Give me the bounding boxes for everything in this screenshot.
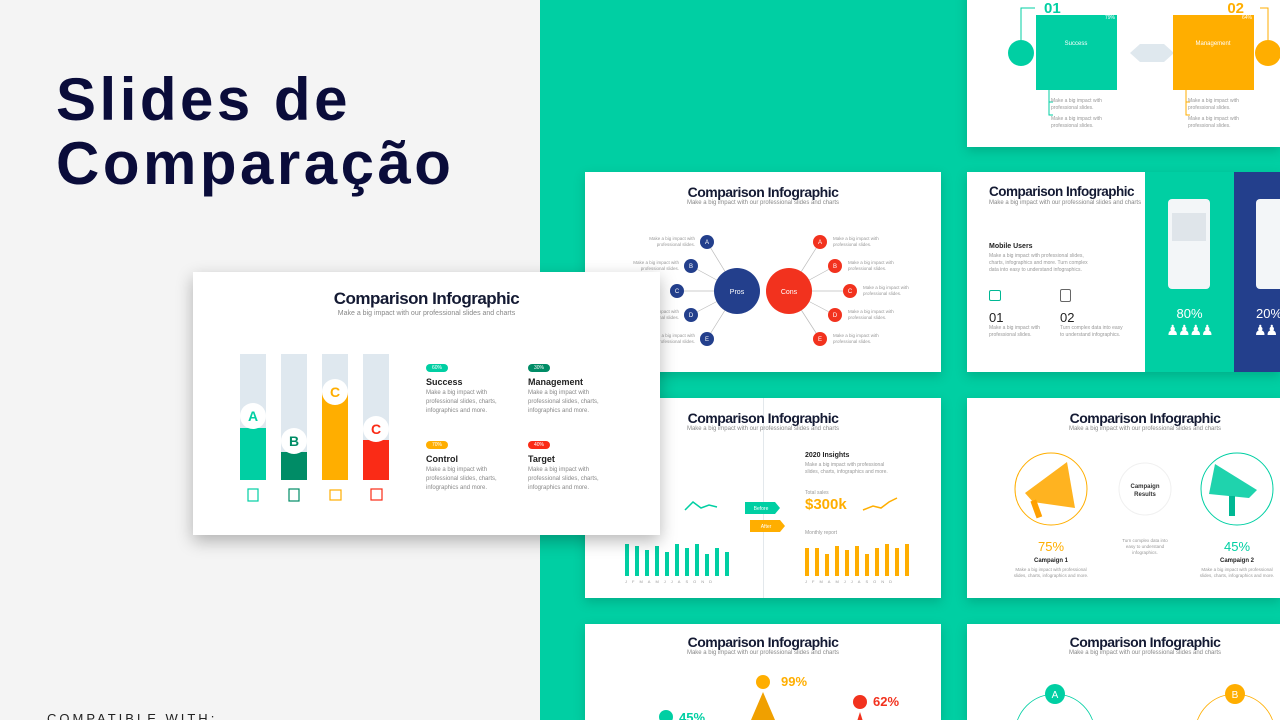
card: mobile users: 01 xyxy=(989,310,1003,325)
bar chart: A xyxy=(248,408,258,424)
card: pros and cons: A xyxy=(818,240,822,246)
card: top right process: Make a big impact with xyxy=(1051,116,1102,122)
card: before/after insights xyxy=(585,398,941,598)
card: mobile users: professional slides. xyxy=(989,332,1032,338)
card: before/after insights: Monthly report xyxy=(805,530,837,536)
card: campaign results xyxy=(967,398,1280,598)
card: before/after insights: Total sales xyxy=(805,490,829,496)
item: management: 30% xyxy=(534,365,544,371)
navy phone panel xyxy=(1234,172,1280,372)
card: top right process: professional slides. xyxy=(1051,105,1094,111)
card: pros and cons: C xyxy=(848,289,853,295)
card: campaign results: Make a big impact with professional xyxy=(1015,567,1087,572)
card: pros and cons: E xyxy=(818,337,822,343)
item: success: Make a big impact with xyxy=(426,390,487,396)
item: management: professional slides, charts, xyxy=(528,399,599,405)
card: pros and cons: Make a big impact with xyxy=(848,260,894,265)
after tag: After xyxy=(761,524,772,530)
card: A/B circles xyxy=(967,624,1280,720)
card: campaign results: infographics. xyxy=(1132,550,1158,555)
card: campaign results: Make a big impact with our professional slides and charts xyxy=(1069,426,1221,432)
bar chart: C xyxy=(330,384,340,400)
bar chart xyxy=(240,354,389,502)
card: pros and cons: professional slides. xyxy=(863,291,901,296)
item: target: infographics and more. xyxy=(528,485,589,491)
item: management: infographics and more. xyxy=(528,408,589,414)
item: control: infographics and more. xyxy=(426,485,487,491)
before tag: Before xyxy=(754,506,769,512)
item: control: Control xyxy=(426,454,458,464)
card: top right process: professional slides. xyxy=(1051,123,1094,129)
card: pyramid: 62% xyxy=(873,694,899,709)
item: management: Management xyxy=(528,377,583,387)
card: pros and cons: D xyxy=(833,313,838,319)
card: top right process xyxy=(967,0,1280,147)
card: top right process: Make a big impact with xyxy=(1051,98,1102,104)
title: Slides de xyxy=(56,66,351,133)
item: success: 60% xyxy=(432,365,442,371)
cons circle xyxy=(766,268,812,314)
card: mobile users: Turn complex data into easy xyxy=(1060,325,1123,331)
teal step box xyxy=(1008,0,1117,115)
card: pros and cons: C xyxy=(675,289,680,295)
card: pros and cons: Make a big impact with xyxy=(833,333,879,338)
item: success: Success xyxy=(426,377,463,387)
navy phone panel: ♟♟ xyxy=(1254,322,1277,338)
double arrow xyxy=(1130,44,1174,62)
card: before/after insights: JFMAMJJASOND xyxy=(625,579,717,584)
card: campaign results: 75% xyxy=(1038,539,1064,554)
card: campaign results: Campaign 2 xyxy=(1220,558,1255,564)
card: A/B circles: Comparison Infographic xyxy=(1070,634,1220,650)
teal phone panel xyxy=(1145,172,1234,372)
featured title: Comparison Infographic xyxy=(334,289,519,308)
orange step box: 64% xyxy=(1242,15,1253,21)
item: management: Make a big impact with xyxy=(528,390,589,396)
card: pros and cons: Comparison Infographic xyxy=(688,184,838,200)
card: pros and cons: D xyxy=(689,313,694,319)
card: campaign results: Comparison Infographic xyxy=(1070,410,1220,426)
card: A/B circles: Make a big impact with our professional slides and charts xyxy=(1069,650,1221,656)
card: mobile users: Make a big impact with our professional slides and charts xyxy=(989,200,1141,206)
card: before/after insights: Make a big impact with our professional slides and charts xyxy=(687,426,839,432)
campaign 2 megaphone xyxy=(1201,453,1273,525)
card: before/after insights: JFMAMJJASOND xyxy=(805,579,897,584)
card: campaign results: easy to understand xyxy=(1126,544,1165,549)
item: success: professional slides, charts, xyxy=(426,399,497,405)
card: before/after insights: Comparison Infographic xyxy=(688,410,838,426)
card: pyramid: Comparison Infographic xyxy=(688,634,838,650)
card: before/after insights: Make a big impact with professional xyxy=(805,462,884,468)
pros circle: Pros xyxy=(730,289,745,296)
card: top right process: professional slides. xyxy=(1188,123,1231,129)
cons circle: Cons xyxy=(781,289,798,296)
card: pros and cons: professional slides. xyxy=(833,339,871,344)
card: campaign results: 45% xyxy=(1224,539,1250,554)
card: pros and cons: A xyxy=(705,240,709,246)
item: success xyxy=(426,364,497,414)
card: pros and cons: Make a big impact with xyxy=(863,285,909,290)
card: pros and cons: professional slides. xyxy=(657,242,695,247)
title xyxy=(56,66,454,197)
card: mobile users xyxy=(967,172,1280,372)
card: mobile users: Comparison Infographic xyxy=(989,184,1134,199)
teal phone panel: ♟♟♟♟ xyxy=(1166,322,1213,338)
teal phone panel: 80% xyxy=(1176,306,1203,321)
card: pros and cons: Make a big impact with xyxy=(649,333,695,338)
teal background panel xyxy=(540,0,1280,720)
card: A/B circles: A xyxy=(1052,690,1059,701)
card: mobile users: Make a big impact with professional slides, xyxy=(989,253,1084,259)
orange step box xyxy=(1173,0,1280,115)
orange step box: Management xyxy=(1195,41,1231,47)
card: campaign results: slides, charts, infographics and more. xyxy=(1014,573,1088,578)
bar chart: C xyxy=(371,421,381,437)
featured slide: bar comparison xyxy=(193,272,660,535)
pros circle xyxy=(714,268,760,314)
title: Comparação xyxy=(56,130,454,197)
before tag xyxy=(745,502,780,514)
card: before/after insights: $300k xyxy=(805,496,847,513)
item: success: infographics and more. xyxy=(426,408,487,414)
card: A/B circles: B xyxy=(1232,690,1239,701)
card: before/after insights: slides, charts, infographics and more. xyxy=(805,469,888,475)
card: before/after insights: 2020 Insights xyxy=(805,452,849,459)
teal step box: Success xyxy=(1065,41,1087,47)
card: pyramid: Make a big impact with our professional slides and charts xyxy=(687,650,839,656)
item: control: Make a big impact with xyxy=(426,467,487,473)
bar chart: B xyxy=(289,433,299,449)
icons xyxy=(989,290,1001,301)
featured slide: bar comparison: Make a big impact with our professional slides and charts xyxy=(338,310,515,317)
item: target xyxy=(528,441,599,491)
card: mobile users: data into easy to understand infographics. xyxy=(989,267,1082,273)
card: campaign results: slides, charts, infographics and more. xyxy=(1200,573,1274,578)
card: pyramid xyxy=(585,624,941,720)
card: pros and cons: professional slides. xyxy=(641,266,679,271)
card: mobile users: charts, infographics and more. Turn complex xyxy=(989,260,1088,266)
card: pros and cons: professional slides. xyxy=(657,339,695,344)
card: pros and cons: professional slides. xyxy=(848,315,886,320)
card: pros and cons: Make a big impact with xyxy=(848,309,894,314)
teal step box: 01 xyxy=(1044,0,1061,17)
card: campaign results: Results xyxy=(1134,492,1156,498)
card: mobile users: Mobile Users xyxy=(989,243,1033,250)
card: top right process: Make a big impact with xyxy=(1188,116,1239,122)
card: pros and cons: E xyxy=(705,337,709,343)
item: control: professional slides, charts, xyxy=(426,476,497,482)
item: target: Make a big impact with xyxy=(528,467,589,473)
orange step box: 02 xyxy=(1227,0,1244,17)
card: campaign results: Campaign xyxy=(1130,484,1160,490)
campaign 1 megaphone xyxy=(1015,453,1087,525)
card: pros and cons xyxy=(585,172,941,372)
card: pros and cons: professional slides. xyxy=(833,242,871,247)
card: mobile users: to understand infographics. xyxy=(1060,332,1120,338)
item: target: 40% xyxy=(534,442,544,448)
card: campaign results: Campaign 1 xyxy=(1034,558,1069,564)
item: target: Target xyxy=(528,454,555,464)
item: control xyxy=(426,441,497,491)
card: mobile users: 02 xyxy=(1060,310,1074,325)
after tag xyxy=(750,520,785,532)
card: pros and cons: Make a big impact with xyxy=(649,236,695,241)
card: pros and cons: Make a big impact with xyxy=(633,260,679,265)
card: pros and cons: B xyxy=(689,264,693,270)
card: campaign results: Make a big impact with professional xyxy=(1201,567,1273,572)
card: top right process: professional slides. xyxy=(1188,105,1231,111)
card: pros and cons: professional slides. xyxy=(848,266,886,271)
item: target: professional slides, charts, xyxy=(528,476,599,482)
card: campaign results: Turn complex data into xyxy=(1122,538,1168,543)
item: control: 70% xyxy=(432,442,442,448)
card: pros and cons: professional slides. xyxy=(641,315,679,320)
item: management xyxy=(528,364,599,414)
card: mobile users: Make a big impact with xyxy=(989,325,1040,331)
card: pros and cons: Make a big impact with xyxy=(633,309,679,314)
card: top right process: Make a big impact with xyxy=(1188,98,1239,104)
teal step box: 79% xyxy=(1105,15,1116,21)
card: pros and cons: B xyxy=(833,264,837,270)
card: pyramid: 99% xyxy=(781,674,807,689)
card: pros and cons: Make a big impact with our professional slides and charts xyxy=(687,200,839,206)
card: pros and cons: Make a big impact with xyxy=(833,236,879,241)
